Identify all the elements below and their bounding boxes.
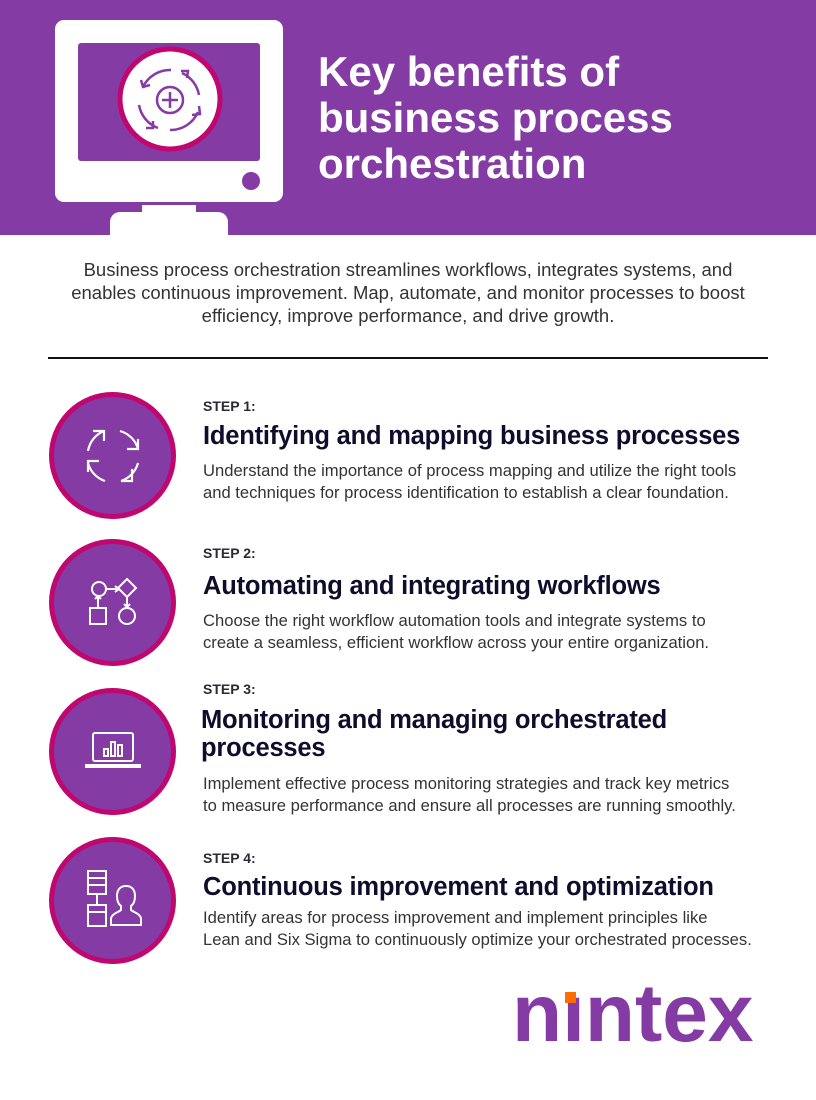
- step 1 text: STEP 1:: [203, 398, 256, 414]
- icon: step 4 server and person: [49, 837, 176, 964]
- intro text: efficiency, improve performance, and drive growth.: [202, 305, 614, 326]
- text: Implement effective process monitoring strategies and track key metrics: [203, 774, 729, 793]
- text: Monitoring and managing orchestrated: [201, 706, 667, 734]
- text: Choose the right workflow automation tools and integrate systems to: [203, 611, 706, 630]
- text: Identify areas for process improvement and implement principles like: [203, 908, 708, 927]
- icon: step 3 laptop: [49, 688, 176, 815]
- text: Lean and Six Sigma to continuously optimize your orchestrated processes.: [203, 930, 752, 949]
- step 4 text: STEP 4:: [203, 850, 256, 866]
- logo: nintex: nıntex: [512, 968, 753, 1059]
- text: create a seamless, efficient workflow across your entire organization.: [203, 633, 709, 652]
- title: business process: [318, 94, 673, 141]
- text: processes: [201, 734, 325, 762]
- icon: step 1 cycle: [49, 392, 176, 519]
- intro text: [71, 259, 745, 326]
- step 2 text: STEP 2:: [203, 545, 256, 561]
- text: to measure performance and ensure all processes are running smoothly.: [203, 796, 736, 815]
- text: and techniques for process identification to establish a clear foundation.: [203, 483, 729, 502]
- text: Continuous improvement and optimization: [203, 873, 714, 901]
- title: orchestration: [318, 140, 586, 187]
- icon: monitor: [55, 20, 283, 235]
- title: [318, 48, 673, 187]
- text: Identifying and mapping business processes: [203, 422, 740, 450]
- text: Understand the importance of process mapping and utilize the right tools: [203, 461, 736, 480]
- step 3 text: STEP 3:: [203, 681, 256, 697]
- icon: step 2 workflow: [49, 539, 176, 666]
- text: Automating and integrating workflows: [203, 572, 660, 600]
- intro text: Business process orchestration streamlines workflows, integrates systems, and: [84, 259, 732, 280]
- intro text: enables continuous improvement. Map, automate, and monitor processes to boost: [71, 282, 745, 303]
- header banner: [0, 0, 816, 235]
- title: Key benefits of: [318, 48, 619, 95]
